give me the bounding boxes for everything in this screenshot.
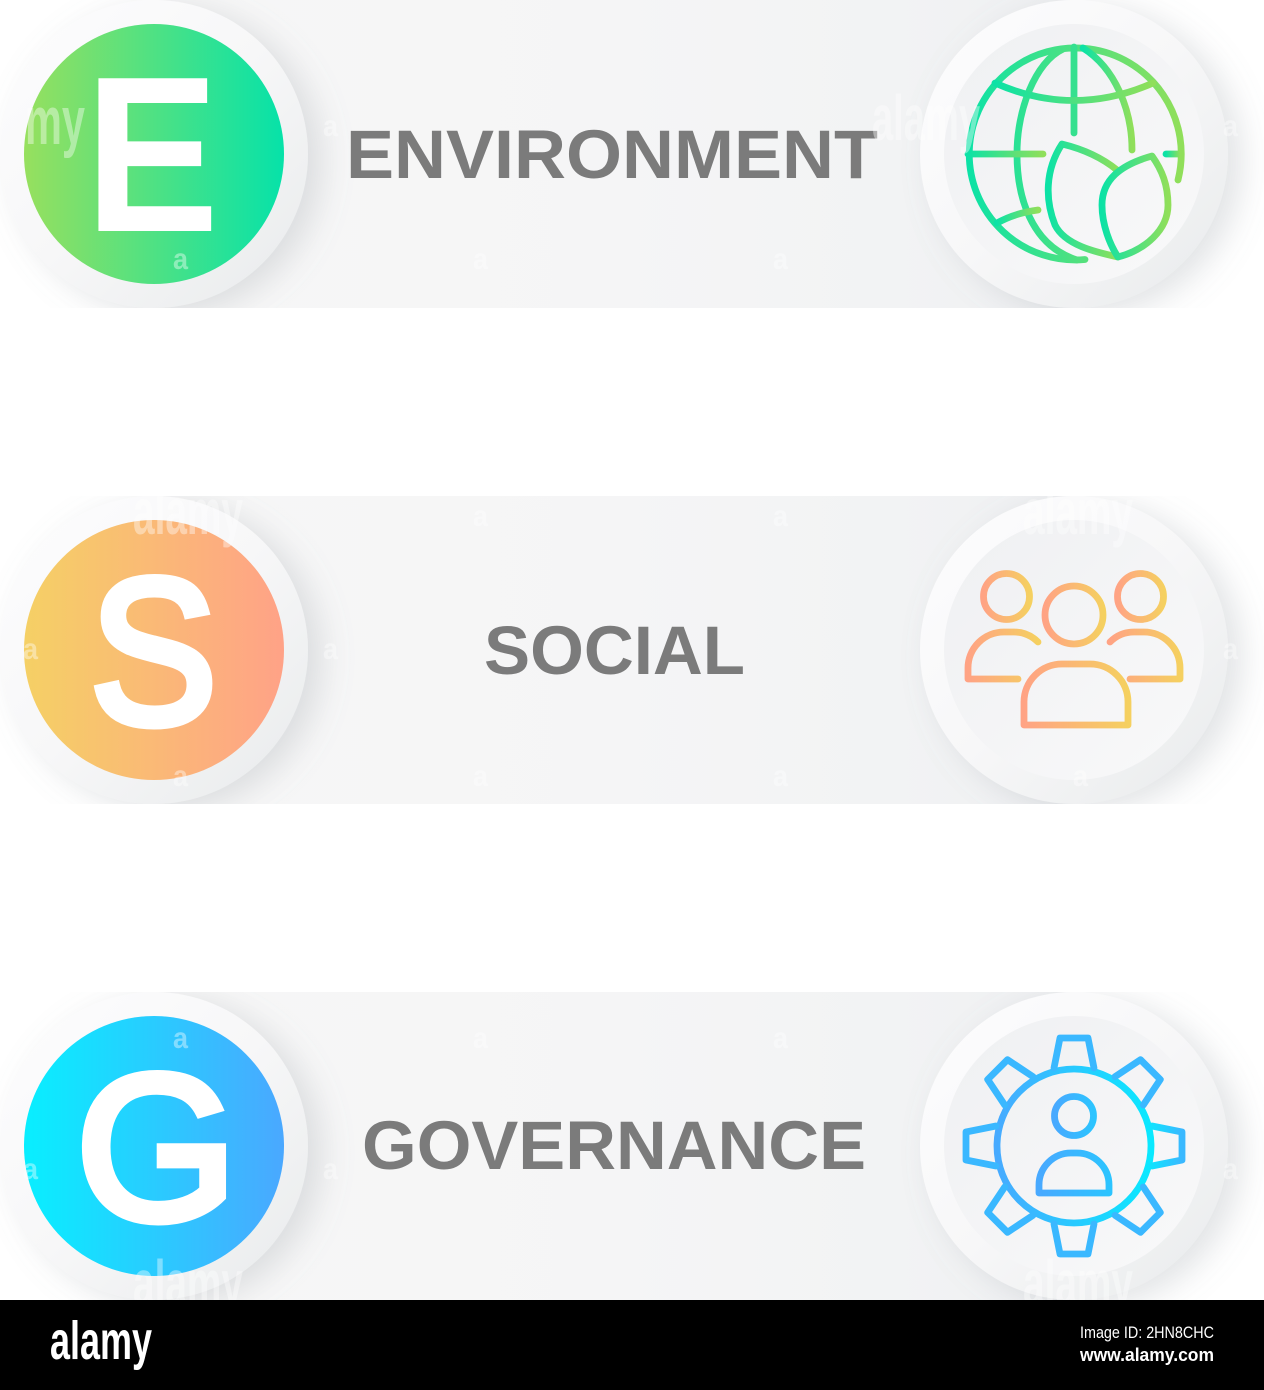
right circle well (944, 1016, 1204, 1276)
panel: social (0, 496, 1228, 804)
left circle ring (0, 496, 308, 804)
footer image id: Image ID: 2HN8CHC (1080, 1323, 1214, 1342)
footer url: www.alamy.com (1079, 1345, 1214, 1365)
stock watermarks: a (1223, 110, 1238, 143)
stock watermarks: a (173, 760, 188, 793)
panel background bar (154, 496, 1074, 804)
letter badge S: S (90, 536, 217, 767)
heading: social: SOCIAL (484, 612, 745, 689)
footer credit band (0, 1300, 1264, 1390)
stock watermarks: a (173, 1022, 188, 1055)
stock watermarks: my (25, 83, 85, 159)
left circle ring (0, 992, 308, 1300)
right circle well (944, 24, 1204, 284)
heading: environment: ENVIRONMENT (346, 116, 878, 193)
panel background bar (154, 992, 1074, 1300)
panel background bar (154, 0, 1074, 308)
heading: governance: GOVERNANCE (362, 1107, 866, 1184)
right circle ring (920, 496, 1228, 804)
stock watermarks: a (773, 1022, 788, 1055)
icon: group of people (968, 574, 1180, 725)
right circle well (944, 520, 1204, 780)
stock watermarks: alamy (133, 1247, 243, 1319)
stock watermarks: a (773, 243, 788, 276)
stock watermarks: a (1223, 1153, 1238, 1186)
stock watermarks: a (473, 1022, 488, 1055)
stock watermarks: a (1223, 633, 1238, 666)
stock watermarks: a (23, 633, 38, 666)
panel: environment (0, 0, 1228, 308)
footer logo: alamy (50, 1311, 152, 1371)
letter badge G: G (76, 1032, 237, 1263)
right circle ring (920, 0, 1228, 308)
panel: governance (0, 992, 1228, 1300)
left circle ring (0, 0, 308, 308)
letter badge E (24, 24, 284, 284)
stock watermarks: a (323, 633, 338, 666)
stock watermarks: a (473, 500, 488, 533)
stock watermarks: a (773, 760, 788, 793)
stock watermarks: alamy (1023, 476, 1133, 548)
icon: globe with leaves (968, 47, 1181, 260)
stock watermarks: a (473, 243, 488, 276)
stock watermarks: a (1073, 760, 1088, 793)
stock watermarks: a (23, 1153, 38, 1186)
stock watermarks: a (473, 760, 488, 793)
stock watermarks: a (773, 500, 788, 533)
stock watermarks: a (323, 1153, 338, 1186)
letter badge G (24, 1016, 284, 1276)
stock watermarks: a (173, 243, 188, 276)
right circle ring (920, 992, 1228, 1300)
stock watermarks: a (323, 110, 338, 143)
letter badge S (24, 520, 284, 780)
letter badge E: E (85, 31, 219, 279)
stock watermarks: alamy (872, 82, 980, 154)
stock watermarks: alamy (133, 476, 243, 548)
icon: gear with person (966, 1038, 1182, 1254)
stock watermarks: alamy (1023, 1247, 1133, 1319)
